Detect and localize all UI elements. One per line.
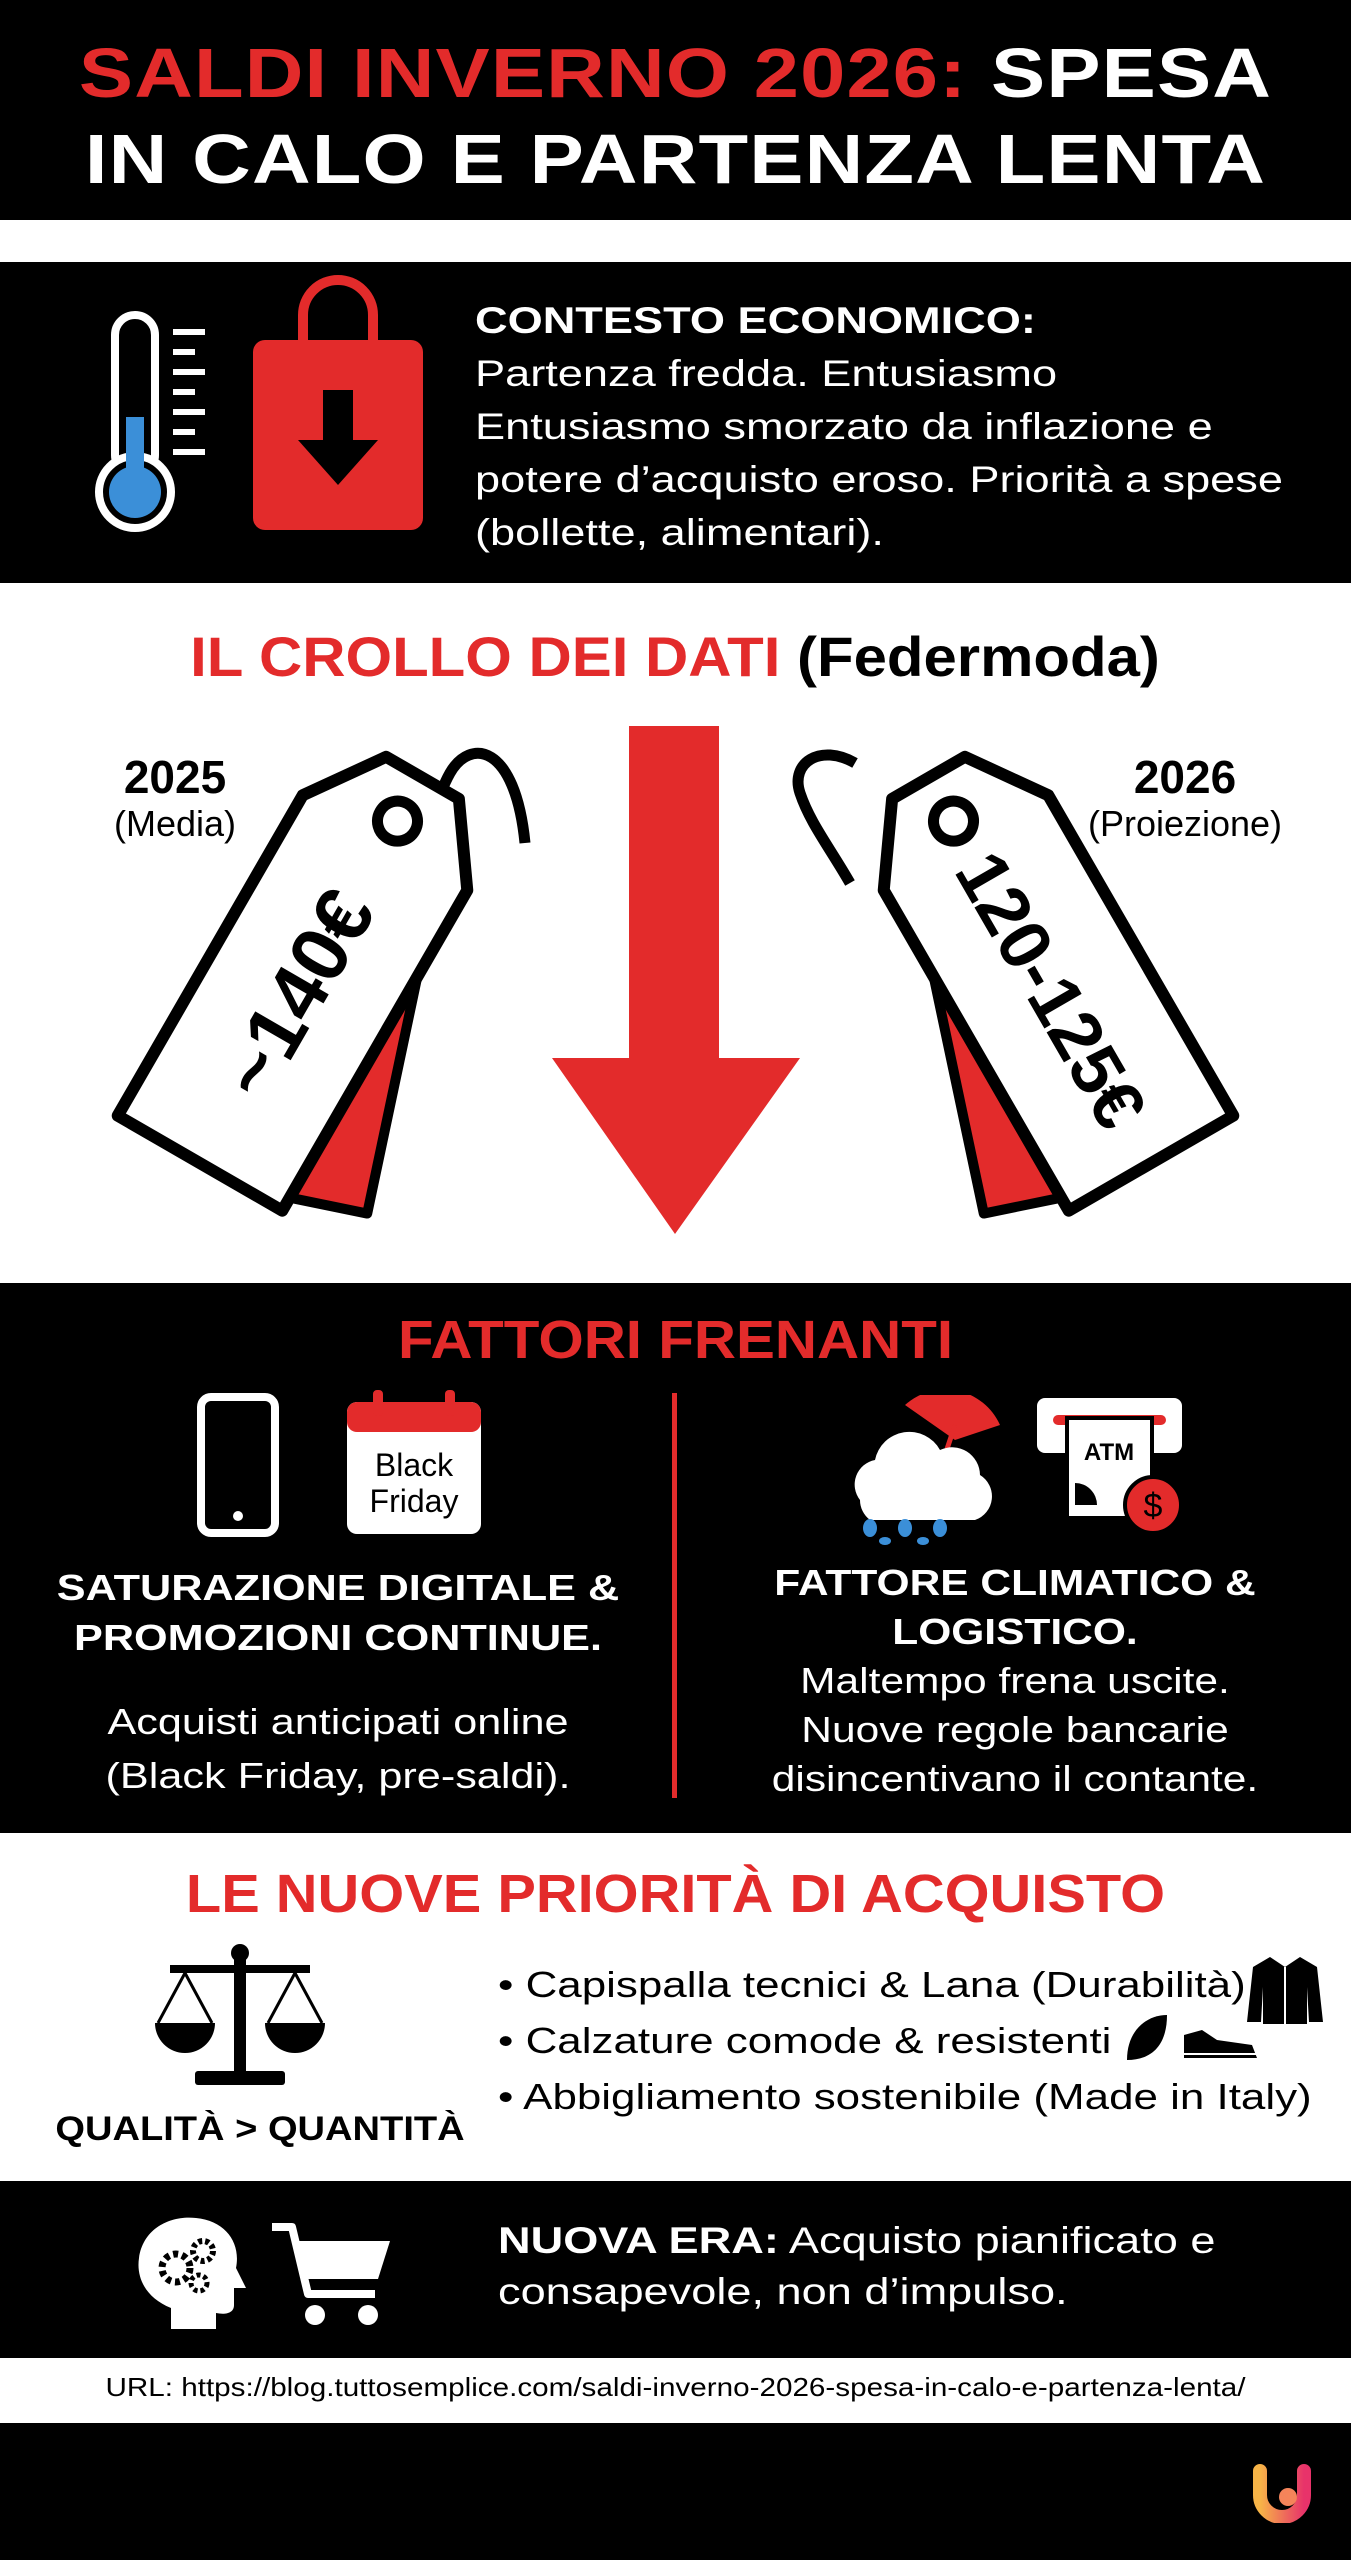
label 2025 xyxy=(114,751,236,844)
heading: nuove priorità: LE NUOVE PRIORITÀ DI ACQUISTO xyxy=(186,1864,1165,1924)
text: nuova era: consapevole, non d’impulso. xyxy=(498,2271,1068,2312)
label 2026 xyxy=(1088,751,1282,844)
panel: nuova era xyxy=(0,2181,1351,2358)
text: fattore climatico: Nuove regole bancarie xyxy=(801,1709,1229,1750)
icon: head with gears xyxy=(138,2218,246,2329)
icon: calendar black friday xyxy=(347,1390,481,1534)
text: contesto xyxy=(475,300,1283,553)
arrow down xyxy=(552,726,800,1234)
url: URL: https://blog.tuttosemplice.com/saldi-inverno-2026-spesa-in-calo-e-partenza-lenta/ xyxy=(105,2372,1246,2402)
label 2025: (Media) xyxy=(114,803,236,844)
label 2026: 2026 xyxy=(1134,751,1236,803)
heading: il crollo dei dati: IL CROLLO DEI DATI (Federmoda) xyxy=(190,627,1160,689)
panel: contesto economico xyxy=(0,262,1351,583)
icon: scale xyxy=(155,1944,325,2085)
list: priorità: • Capispalla tecnici & Lana (Durabilità) xyxy=(498,1964,1246,2005)
text: nuova era: NUOVA ERA: Acquisto pianificato e xyxy=(498,2220,1216,2261)
list: priorità: • Abbigliamento sostenibile (Made in Italy) xyxy=(498,2076,1312,2117)
text: contesto: Partenza fredda. Entusiasmo xyxy=(475,353,1057,394)
text: contesto: Entusiasmo smorzato da inflazione e xyxy=(475,406,1213,447)
tag: 2026 xyxy=(781,730,1233,1248)
text: saturazione digitale: Acquisti anticipati online xyxy=(107,1701,569,1742)
icon: atm xyxy=(1037,1398,1182,1531)
title xyxy=(79,34,1272,198)
icon: thermometer xyxy=(95,311,205,532)
text: fattore climatico xyxy=(772,1562,1258,1799)
title: SALDI INVERNO 2026: SPESA xyxy=(79,34,1272,112)
text: saturazione digitale: (Black Friday, pre-saldi). xyxy=(106,1755,570,1796)
icon: rain cloud umbrella xyxy=(854,1395,1000,1545)
icon: smartphone xyxy=(197,1393,279,1537)
title: IN CALO E PARTENZA LENTA xyxy=(85,120,1266,198)
icon: calendar black friday: Friday xyxy=(370,1483,458,1519)
icon: atm: $ xyxy=(1144,1487,1163,1525)
text: fattore climatico: Maltempo frena uscite. xyxy=(800,1660,1230,1701)
title band xyxy=(0,0,1351,220)
text: contesto: (bollette, alimentari). xyxy=(475,512,884,553)
tag: 2025: ~140€ xyxy=(202,875,392,1114)
label 2026: (Proiezione) xyxy=(1088,803,1282,844)
panel: fattori frenanti xyxy=(0,1283,1351,1833)
tag: 2025 xyxy=(118,730,570,1248)
footer xyxy=(0,2423,1351,2560)
list: priorità xyxy=(498,1964,1312,2117)
icon: shopping bag down xyxy=(253,275,423,530)
text: fattore climatico: disincentivano il contante. xyxy=(772,1758,1258,1799)
tag: 2026: 120-125€ xyxy=(939,839,1161,1142)
panel: nuove priorità xyxy=(55,1864,1323,2148)
text: qualità > quantità: QUALITÀ > QUANTITÀ xyxy=(55,2110,465,2148)
icon: jacket xyxy=(1247,1957,1323,2024)
list: priorità: • Calzature comode & resistenti xyxy=(498,2020,1111,2061)
text: nuova era xyxy=(498,2220,1216,2312)
text: contesto: potere d’acquisto eroso. Priorità a spese xyxy=(475,459,1283,500)
icon: cart xyxy=(272,2223,390,2325)
icon: leaf and shoe xyxy=(1127,2015,1257,2060)
text: fattore climatico: LOGISTICO. xyxy=(892,1611,1138,1652)
icon: calendar black friday: Black xyxy=(375,1447,454,1483)
logo xyxy=(1253,2464,1311,2523)
panel: crollo dei dati xyxy=(112,627,1282,1234)
label 2025: 2025 xyxy=(124,751,226,803)
text: saturazione digitale: PROMOZIONI CONTINUE. xyxy=(74,1617,602,1658)
icon: atm: ATM xyxy=(1084,1439,1134,1466)
heading: fattori frenanti: FATTORI FRENANTI xyxy=(398,1310,953,1370)
text: fattore climatico: FATTORE CLIMATICO & xyxy=(774,1562,1256,1603)
text: contesto: CONTESTO ECONOMICO: xyxy=(475,300,1036,341)
text: saturazione digitale: SATURAZIONE DIGITALE & xyxy=(57,1567,619,1608)
text: saturazione digitale xyxy=(57,1567,619,1796)
